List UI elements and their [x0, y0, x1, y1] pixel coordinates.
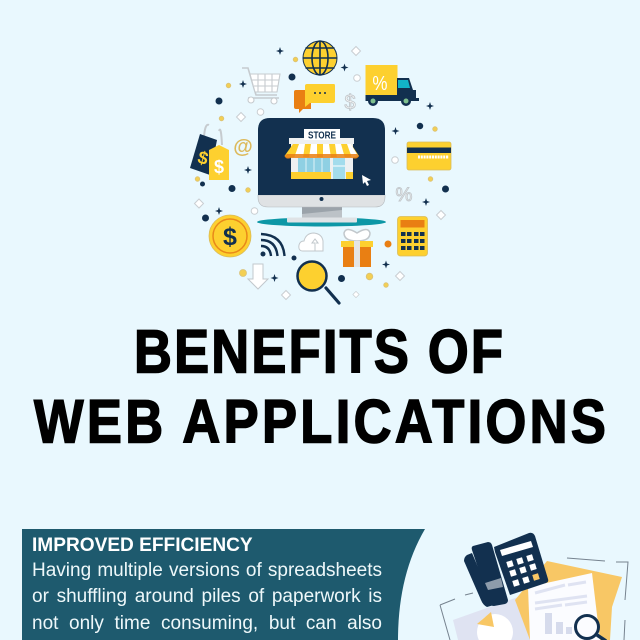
folder [515, 561, 622, 640]
cursor [362, 175, 371, 186]
monitor with storefront: STORE [308, 130, 336, 141]
icon: delivery truck with percent [366, 65, 419, 106]
magnifier [597, 635, 606, 640]
icon: credit card [407, 142, 451, 170]
monitor body [258, 195, 385, 207]
icon: download arrow [248, 264, 268, 289]
icon: delivery truck with percent: % [372, 72, 388, 94]
text block: improved efficiency: or shuffling around piles of paperwork is [32, 586, 382, 607]
monitor stand [302, 205, 342, 218]
icon: magnifying glass [298, 262, 339, 303]
icon: percent outline: % [396, 185, 413, 206]
icon: dollar coin [209, 215, 251, 257]
icon: cloud upload [299, 233, 323, 251]
text block: improved efficiency: not only time consuming, but can also [32, 613, 382, 634]
text block: improved efficiency [32, 535, 382, 634]
title [34, 318, 606, 456]
icon: gift box [341, 230, 373, 267]
text block: improved efficiency: IMPROVED EFFICIENCY [32, 535, 253, 556]
icon: price tags: $ [196, 147, 210, 169]
icon: calculator [398, 216, 428, 256]
chart sheet [453, 597, 530, 640]
store awning [284, 144, 359, 158]
icon: at sign: @ [233, 136, 253, 158]
scattered decorative dots [194, 46, 449, 300]
paper with chart [528, 573, 600, 640]
monitor teal shadow [257, 218, 386, 226]
title: BENEFITS OF [134, 318, 503, 386]
store roof and sign [289, 138, 354, 144]
icon: shopping cart [242, 68, 280, 104]
icon: dollar coin: $ [223, 223, 237, 251]
icon: price tags [190, 125, 229, 180]
store building [291, 144, 353, 179]
icon: wifi signal [260, 234, 284, 256]
icon: globe [303, 41, 337, 75]
icon: chat bubbles [294, 84, 335, 113]
title: WEB APPLICATIONS [34, 388, 606, 456]
icon: dollar outline: $ [344, 92, 356, 114]
illustration: office phone, folder and documents [440, 533, 628, 640]
text block: improved efficiency: Having multiple versions of spreadsheets [32, 560, 382, 581]
panel: improved efficiency background [22, 529, 425, 640]
icon: price tags: $ [214, 157, 224, 177]
phone [464, 553, 494, 607]
frame lines [440, 558, 628, 640]
monitor with storefront [257, 118, 386, 226]
